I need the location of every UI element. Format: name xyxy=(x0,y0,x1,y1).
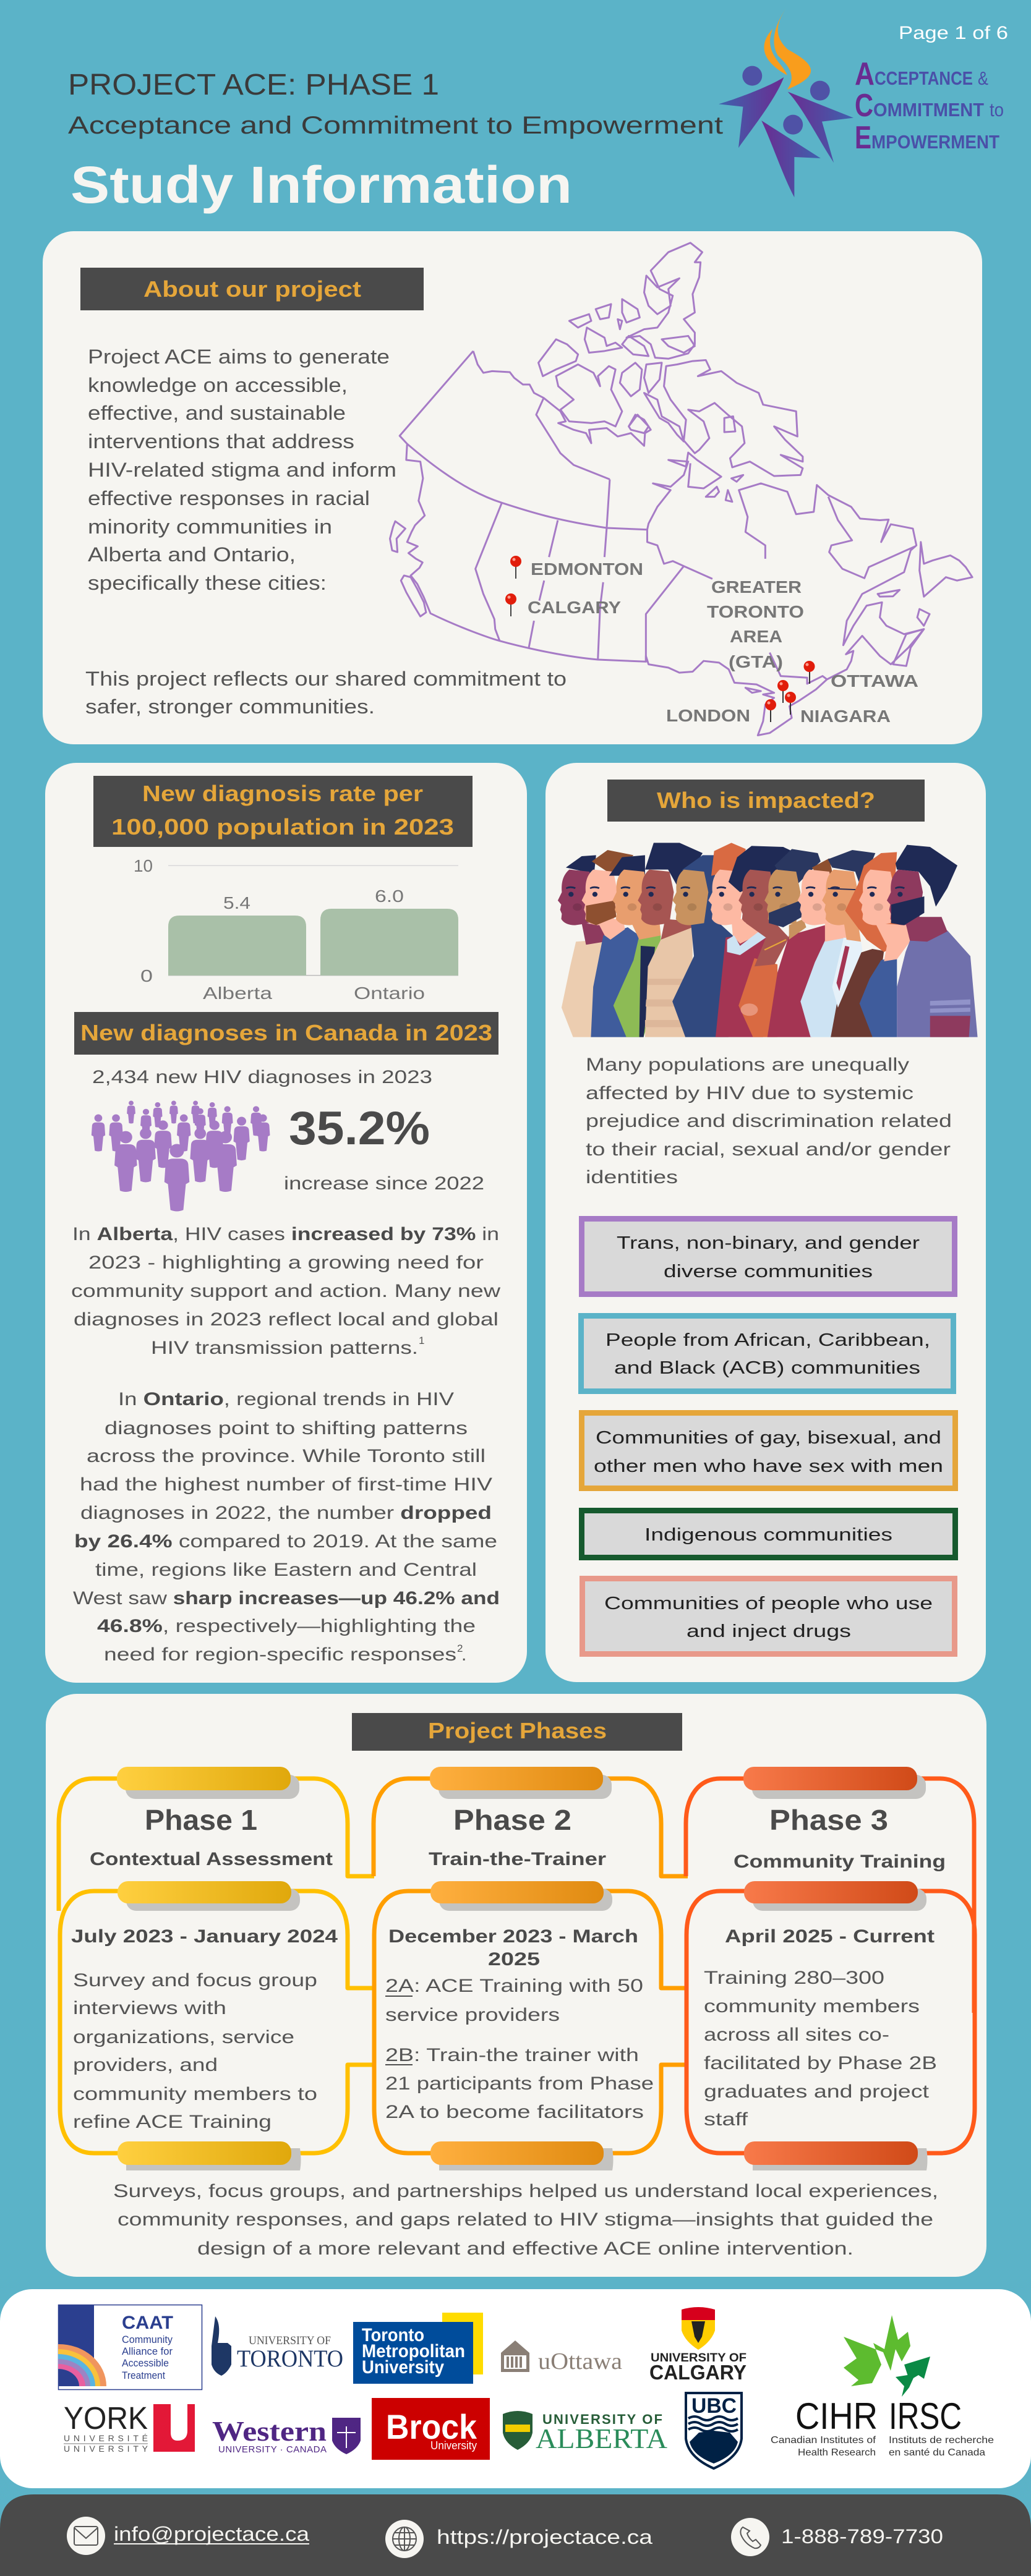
text: unequal impact xyxy=(586,1055,952,1188)
stat: new HIV diagnoses count: 2,434 new HIV diagnoses in 2023 xyxy=(92,1067,432,1087)
text: unequal impact: affected by HIV due to systemic xyxy=(586,1083,913,1103)
logo: CIHR IRSC: Instituts de recherche xyxy=(889,2435,994,2446)
logo: Toronto Metropolitan University xyxy=(353,2313,483,2384)
column: phase 2: 2B: Train-the trainer with xyxy=(385,2045,639,2065)
text: unequal impact: to their racial, sexual and/or gender xyxy=(586,1139,951,1160)
text: project description: interventions that address xyxy=(88,430,354,453)
column: phase 3: Phase 3 xyxy=(769,1804,888,1836)
text: project description: effective responses in racial xyxy=(88,487,370,509)
text: Ontario paragraph: 2 xyxy=(457,1643,463,1654)
logo: York University xyxy=(64,2400,195,2454)
bar chart: diagnosis rate by province: 0 xyxy=(140,966,153,985)
icon: crowd of people xyxy=(92,1101,270,1211)
heading: new diagnoses in Canada xyxy=(74,1012,498,1055)
logo: University of Alberta: ALBERTA xyxy=(536,2423,667,2454)
box: gay and bisexual communities: Communities of gay, bisexual, and xyxy=(596,1428,941,1448)
map pins xyxy=(505,556,815,722)
box: gay and bisexual communities xyxy=(581,1413,955,1489)
text: unequal impact: Many populations are unequally xyxy=(586,1055,909,1075)
map city labels: LONDON xyxy=(666,706,750,725)
logo: UBC xyxy=(686,2393,742,2468)
text: Alberta paragraph: diagnoses in 2023 reflect local and global xyxy=(74,1309,498,1330)
text: Ontario paragraph: had the highest number of first-time HIV xyxy=(80,1474,492,1495)
stat: 35.2 percent increase xyxy=(284,1102,484,1194)
column: phase 2: December 2023 - March xyxy=(388,1926,638,1947)
bar chart: diagnosis rate by province: Alberta xyxy=(203,984,273,1003)
bar: Alberta xyxy=(168,916,306,976)
column: phase 1: community members to xyxy=(73,2084,317,2104)
icon: globe xyxy=(385,2520,424,2558)
column: phase 1: organizations, service xyxy=(73,2027,294,2047)
bar chart: diagnosis rate by province: 6.0 xyxy=(375,886,404,906)
map city labels: AREA xyxy=(730,627,782,646)
box: gay and bisexual communities: other men who have sex with men xyxy=(594,1456,943,1476)
text: phases summary: design of a more relevant and effective ACE online intervention. xyxy=(197,2238,853,2259)
box: trans communities: diverse communities xyxy=(664,1262,873,1282)
text: phases summary: community responses, and gaps related to HIV stigma—insights that guided the xyxy=(118,2209,933,2230)
heading: new diagnoses in Canada: New diagnoses in Canada in 2023 xyxy=(80,1020,492,1045)
bar chart: diagnosis rate by province: 5.4 xyxy=(223,893,250,912)
heading: about our project xyxy=(80,268,424,310)
logo: York University: UNIVERSITY xyxy=(64,2444,148,2454)
logo: University of Alberta xyxy=(503,2411,667,2454)
column: phase 1: Phase 1 xyxy=(145,1804,257,1836)
stat: 35.2 percent increase: 35.2% xyxy=(289,1102,430,1155)
logo: University of Calgary: CALGARY xyxy=(649,2361,747,2384)
column: phase 2: service providers xyxy=(385,2005,560,2025)
text: phases summary: Surveys, focus groups, and partnerships helped us understand local experiences, xyxy=(113,2181,938,2201)
text: Ontario paragraph: diagnoses point to shifting patterns xyxy=(105,1418,468,1439)
logo: CIHR IRSC: Health Research xyxy=(798,2447,876,2458)
title block: PROJECT ACE: PHASE 1 xyxy=(68,69,439,101)
map city labels: CALGARY xyxy=(528,598,621,617)
map city labels: OTTAWA xyxy=(831,671,918,691)
bar chart: diagnosis rate by province: 10 xyxy=(134,856,153,875)
icon: email xyxy=(67,2517,105,2555)
logo: Brock University xyxy=(372,2398,490,2460)
column: phase 3: staff xyxy=(704,2109,748,2130)
logo: University of Calgary xyxy=(649,2307,747,2384)
logo: Brock University: Brock xyxy=(386,2407,477,2446)
heading: project phases: Project Phases xyxy=(428,1718,607,1743)
text: shared commitment: safer, stronger communities. xyxy=(85,695,375,718)
column: phase 3: facilitated by Phase 2B xyxy=(704,2053,937,2073)
box: ACB communities: and Black (ACB) communities xyxy=(614,1358,920,1378)
text: project description xyxy=(88,346,396,594)
column: phase 1: interviews with xyxy=(73,1998,226,2018)
text: shared commitment: This project reflects our shared commitment to xyxy=(85,668,567,690)
panel: who is impacted xyxy=(545,763,986,1682)
column: phase 2: 2025 xyxy=(488,1949,540,1970)
logo: University of Toronto: TORONTO xyxy=(237,2345,343,2372)
text: project description: minority communities in xyxy=(88,516,332,538)
logo: Project ACE xyxy=(719,7,1004,197)
map city labels xyxy=(528,559,918,726)
panel: partner logos xyxy=(0,2289,1031,2488)
column: phase 3: April 2025 - Current xyxy=(725,1926,935,1947)
column: phase 3: Training 280–300 xyxy=(704,1968,884,1988)
heading: new diagnosis rate xyxy=(93,776,473,847)
heading: who is impacted xyxy=(607,780,925,822)
contact: phone number: 1-888-789-7730 xyxy=(781,2525,943,2548)
text: project description: effective, and sustainable xyxy=(88,402,346,424)
column: phase 2: 2A to become facilitators xyxy=(385,2102,644,2122)
map city labels: (GTA) xyxy=(729,652,783,671)
logo: University of Alberta: UNIVERSITY OF xyxy=(542,2412,662,2427)
column: phase 1: Survey and focus group xyxy=(73,1970,317,1991)
logo wordmark: & xyxy=(978,67,988,89)
logo: CIHR IRSC: IRSC xyxy=(889,2395,962,2437)
box: people who use drugs: Communities of people who use xyxy=(604,1594,933,1613)
text: Ontario paragraph: by 26.4% compared to 2019. At the same xyxy=(74,1531,497,1552)
heading: new diagnosis rate: 100,000 population in 2023 xyxy=(111,814,454,840)
logo: University of Toronto xyxy=(212,2316,343,2376)
text: unequal impact: identities xyxy=(586,1167,678,1188)
panel: project phases xyxy=(46,1694,986,2277)
logo: CIHR IRSC xyxy=(771,2315,994,2458)
text: Alberta paragraph: In Alberta , HIV cases increased by 73% in xyxy=(72,1224,499,1244)
logo: Toronto Metropolitan University: University xyxy=(362,2357,444,2378)
text: project description: Alberta and Ontario, xyxy=(88,543,296,566)
logo: University of Toronto: UNIVERSITY OF xyxy=(249,2334,331,2347)
column: phase 2 xyxy=(385,1804,654,2122)
column: phase 1 xyxy=(71,1804,338,2132)
box: ACB communities xyxy=(581,1316,954,1391)
heading: new diagnosis rate: New diagnosis rate per xyxy=(142,781,423,806)
logo: Brock University: University xyxy=(430,2439,477,2452)
column: phase 1: providers, and xyxy=(73,2055,218,2075)
box: trans communities: Trans, non-binary, and gender xyxy=(617,1233,920,1253)
map city labels: NIAGARA xyxy=(800,707,891,726)
column: phase 1: July 2023 - January 2024 xyxy=(71,1926,338,1947)
text: Alberta paragraph xyxy=(71,1224,500,1358)
title block: Acceptance and Commitment to Empowerment xyxy=(68,112,723,139)
logo: University of Calgary: UNIVERSITY OF xyxy=(651,2352,747,2365)
footer: contact bar xyxy=(0,2494,1031,2576)
logo: CIHR IRSC: en santé du Canada xyxy=(889,2447,985,2458)
column: phase 1: refine ACE Training xyxy=(73,2112,272,2132)
stat: 35.2 percent increase: increase since 2022 xyxy=(284,1173,484,1194)
logo wordmark: CCEPTANCE xyxy=(875,67,973,89)
logo: Toronto Metropolitan University: Metropolitan xyxy=(362,2341,465,2361)
logo wordmark: OMMITMENT xyxy=(873,99,984,121)
logo: CAAT: CAAT xyxy=(122,2313,173,2333)
bar: Ontario xyxy=(320,909,458,976)
heading: project phases xyxy=(352,1713,682,1751)
logo: CAAT: Community xyxy=(122,2334,173,2345)
logo: York University: UNIVERSITÉ xyxy=(64,2433,148,2443)
logo wordmark: E xyxy=(855,120,871,156)
panel: about our project xyxy=(43,231,982,744)
phase frames xyxy=(59,1779,975,2153)
column: phase 2: 2A: ACE Training with 50 xyxy=(385,1976,643,1996)
logo: Western University: UNIVERSITY · CANADA xyxy=(218,2444,327,2455)
logo: uOttawa xyxy=(501,2340,622,2374)
box: ACB communities: People from African, Caribbean, xyxy=(605,1330,930,1350)
map city labels: GREATER xyxy=(711,577,802,597)
column: phase 2: 21 participants from Phase xyxy=(385,2073,654,2094)
logo: CIHR IRSC: Canadian Institutes of xyxy=(771,2435,876,2446)
box: trans communities xyxy=(581,1219,955,1294)
column: phase 3: across all sites co- xyxy=(704,2025,889,2045)
text: Ontario paragraph: across the province. While Toronto still xyxy=(87,1446,486,1466)
text: Ontario paragraph: In Ontario , regional trends in HIV xyxy=(118,1389,454,1409)
map city labels: EDMONTON xyxy=(531,559,643,579)
text: phases summary xyxy=(113,2181,938,2259)
logo wordmark: A xyxy=(855,56,875,92)
logo wordmark: MPOWERMENT xyxy=(871,131,999,153)
logo: UBC: UBC xyxy=(691,2394,737,2418)
text: Ontario paragraph: . xyxy=(461,1644,466,1665)
icon: phone xyxy=(731,2518,769,2556)
heading: who is impacted: Who is impacted? xyxy=(657,788,875,813)
column: phase 3: community members xyxy=(704,1996,920,2017)
bar chart: diagnosis rate by province xyxy=(134,856,458,1003)
text: shared commitment xyxy=(85,668,567,718)
heading: about our project: About our project xyxy=(143,276,361,302)
logo: CAAT: Accessible xyxy=(122,2357,169,2369)
text: Ontario paragraph: 46.8% , respectively—highlighting the xyxy=(97,1616,476,1636)
column: phase 3 xyxy=(704,1804,946,2130)
logo: Western University: Western xyxy=(212,2415,327,2447)
logo: Toronto Metropolitan University: Toronto xyxy=(362,2325,424,2345)
text: Ontario paragraph: time, regions like Eastern and Central xyxy=(95,1560,477,1580)
logo: uOttawa: uOttawa xyxy=(538,2349,622,2374)
logo: Western University xyxy=(212,2415,361,2455)
box: Indigenous communities xyxy=(581,1511,955,1558)
contact: email address: info@projectace.ca xyxy=(114,2523,309,2545)
logo: CAAT xyxy=(58,2305,202,2390)
phase pills xyxy=(117,1767,928,2170)
text: project description: specifically these cities: xyxy=(88,572,327,594)
column: phase 2: Phase 2 xyxy=(453,1804,571,1836)
box: Indigenous communities: Indigenous communities xyxy=(644,1525,892,1545)
title block: Study Information xyxy=(71,156,572,214)
title block xyxy=(68,69,723,214)
text: Alberta paragraph: 1 xyxy=(419,1335,424,1346)
logo: CAAT: Treatment xyxy=(122,2370,165,2381)
text: project description: HIV-related stigma and inform xyxy=(88,459,396,481)
text: Alberta paragraph: 2023 - highlighting a growing need for xyxy=(88,1252,484,1273)
logo: CIHR IRSC: CIHR xyxy=(795,2395,878,2437)
panel: new diagnoses xyxy=(45,763,527,1683)
bar chart: diagnosis rate by province: Ontario xyxy=(354,984,425,1003)
column: phase 2: Train-the-Trainer xyxy=(429,1849,606,1869)
text: project description: knowledge on accessible, xyxy=(88,374,348,396)
box: people who use drugs: and inject drugs xyxy=(687,1622,851,1641)
box: people who use drugs xyxy=(583,1579,955,1654)
text: unequal impact: prejudice and discrimination related xyxy=(586,1111,952,1131)
text: project description: Project ACE aims to generate xyxy=(88,346,390,368)
text: Ontario paragraph xyxy=(73,1389,500,1665)
text: Alberta paragraph: HIV transmission patterns. xyxy=(151,1338,418,1358)
logo wordmark xyxy=(855,56,1004,156)
text: Ontario paragraph: need for region-specific responses xyxy=(104,1644,456,1665)
text: Alberta paragraph: community support and action. Many new xyxy=(71,1281,500,1301)
contact: website: https://projectace.ca xyxy=(437,2526,652,2548)
map city labels: TORONTO xyxy=(707,602,804,621)
page number: Page 1 of 6 xyxy=(899,23,1008,43)
illustration: diverse group of people in profile xyxy=(558,843,978,1037)
column: phase 3: graduates and project xyxy=(704,2081,930,2102)
logo wordmark: C xyxy=(855,88,873,124)
icon: flame and three people xyxy=(719,7,853,197)
logo: York University: YORK xyxy=(64,2400,148,2436)
logo: CAAT: Alliance for xyxy=(122,2345,173,2357)
column: phase 3: Community Training xyxy=(734,1851,946,1872)
text: Ontario paragraph: diagnoses in 2022, the number dropped xyxy=(80,1503,492,1523)
map: Canada outline xyxy=(390,243,972,736)
column: phase 1: Contextual Assessment xyxy=(90,1849,333,1869)
logo wordmark: to xyxy=(990,99,1004,121)
text: Ontario paragraph: West saw sharp increases—up 46.2% and xyxy=(73,1588,500,1609)
